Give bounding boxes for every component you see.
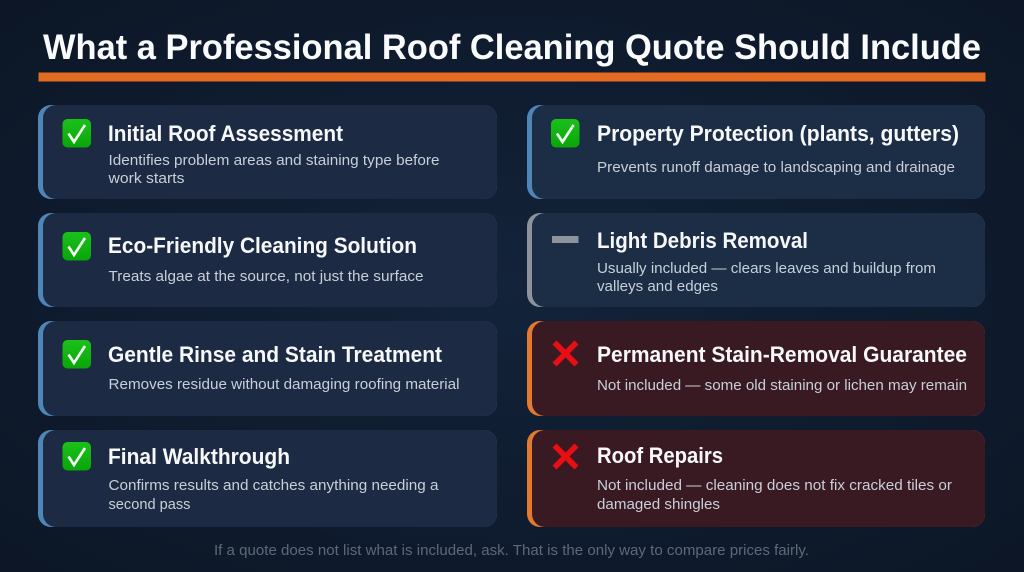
- description: Treats algae at the source, not just the surface: [108, 268, 424, 285]
- icon: check: [62, 340, 91, 368]
- description: [107, 152, 439, 187]
- description: Confirms results and catches anything needing a: [108, 477, 439, 494]
- card: Eco-Friendly Cleaning Solution: [38, 213, 497, 307]
- description: damaged shingles: [597, 496, 720, 513]
- card: Roof Repairs: [527, 430, 985, 527]
- description: valleys and edges: [597, 278, 718, 295]
- card: Initial Roof Assessment: [38, 105, 497, 199]
- description: Prevents runoff damage to landscaping and drainage: [597, 159, 955, 176]
- description: [597, 477, 952, 513]
- icon: check: [62, 119, 91, 148]
- heading: Eco-Friendly Cleaning Solution: [108, 233, 417, 258]
- card: Gentle Rinse and Stain Treatment: [38, 321, 497, 416]
- description: work starts: [107, 170, 184, 187]
- heading: Permanent Stain-Removal Guarantee: [597, 342, 967, 367]
- description: Usually included — clears leaves and buildup from: [597, 260, 936, 277]
- heading: Property Protection (plants, gutters): [597, 121, 959, 146]
- card: Property Protection: [527, 105, 985, 199]
- heading: Gentle Rinse and Stain Treatment: [108, 342, 443, 367]
- description: Not included — cleaning does not fix cracked tiles or: [597, 477, 952, 494]
- description: second pass: [108, 496, 190, 513]
- card: Final Walkthrough: [38, 430, 497, 527]
- footer note: If a quote does not list what is included, ask. That is the only way to compare prices fairly.: [214, 543, 809, 559]
- icon: check: [551, 119, 580, 148]
- icon: dash: [552, 236, 578, 243]
- description: Removes residue without damaging roofing material: [108, 376, 459, 393]
- icon: check: [62, 442, 91, 470]
- title underline: [38, 72, 986, 82]
- title: What a Professional Roof Cleaning Quote Should Include: [43, 28, 981, 67]
- card: Light Debris Removal: [527, 213, 985, 307]
- card: Permanent Stain-Removal Guarantee: [527, 321, 985, 416]
- heading: Final Walkthrough: [108, 444, 290, 469]
- description: Not included — some old staining or lichen may remain: [597, 377, 967, 394]
- description: Identifies problem areas and staining type before: [108, 152, 440, 169]
- icon: check: [62, 232, 91, 260]
- description: [108, 477, 439, 513]
- heading: Initial Roof Assessment: [108, 121, 344, 146]
- heading: Light Debris Removal: [597, 228, 808, 253]
- heading: Roof Repairs: [597, 443, 723, 468]
- icon: cross: [554, 446, 576, 468]
- description: [597, 260, 936, 295]
- icon: cross: [554, 342, 576, 364]
